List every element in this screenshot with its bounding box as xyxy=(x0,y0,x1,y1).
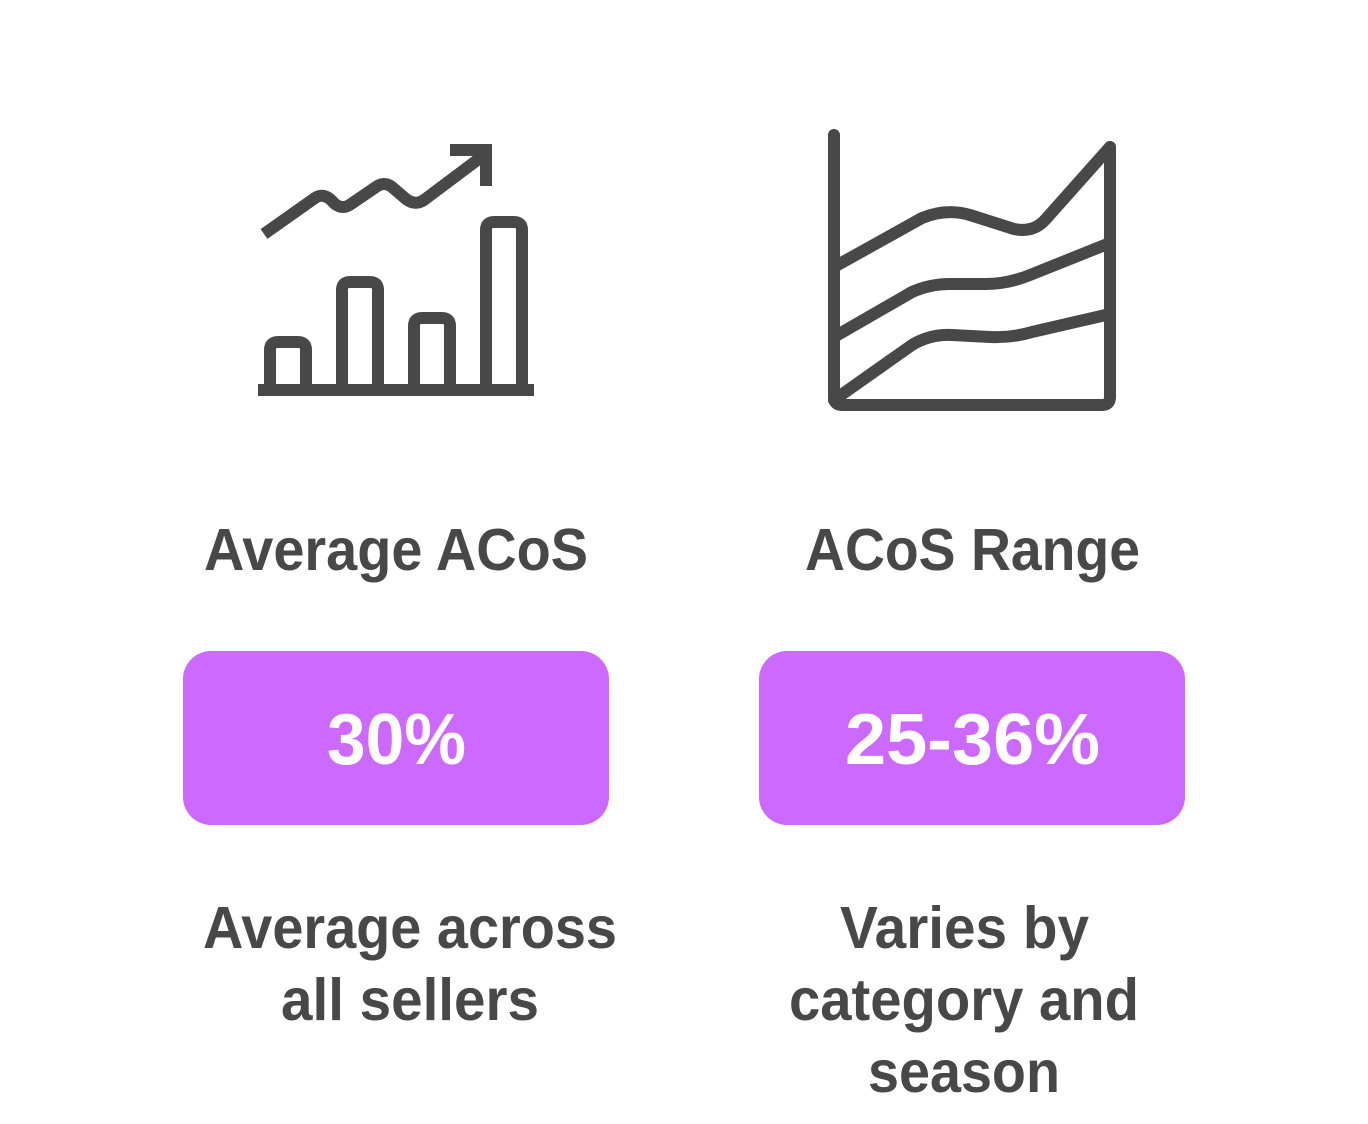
value badge: 30%: 30% xyxy=(327,700,466,780)
heading: Average ACoS: Average ACoS xyxy=(204,517,588,583)
description: varies by category and season: season xyxy=(868,1039,1060,1105)
description: average across all sellers: all sellers xyxy=(281,967,539,1033)
description: average across all sellers: Average across xyxy=(203,895,617,961)
description: varies by category and season xyxy=(789,895,1139,1105)
panel: ACoS range xyxy=(759,135,1185,1105)
description: varies by category and season: category and xyxy=(789,967,1139,1033)
value badge: 25-36%: 25-36% xyxy=(845,700,1100,780)
panel: average ACoS xyxy=(183,150,617,1033)
description: varies by category and season: Varies by xyxy=(840,895,1089,961)
heading: ACoS Range: ACoS Range xyxy=(805,517,1140,583)
value badge: 30% xyxy=(183,651,609,825)
value badge: 25-36% xyxy=(759,651,1185,825)
description: average across all sellers xyxy=(203,895,617,1033)
icon: stacked area chart xyxy=(834,135,1110,405)
icon: rising bar chart with arrow xyxy=(258,150,534,390)
